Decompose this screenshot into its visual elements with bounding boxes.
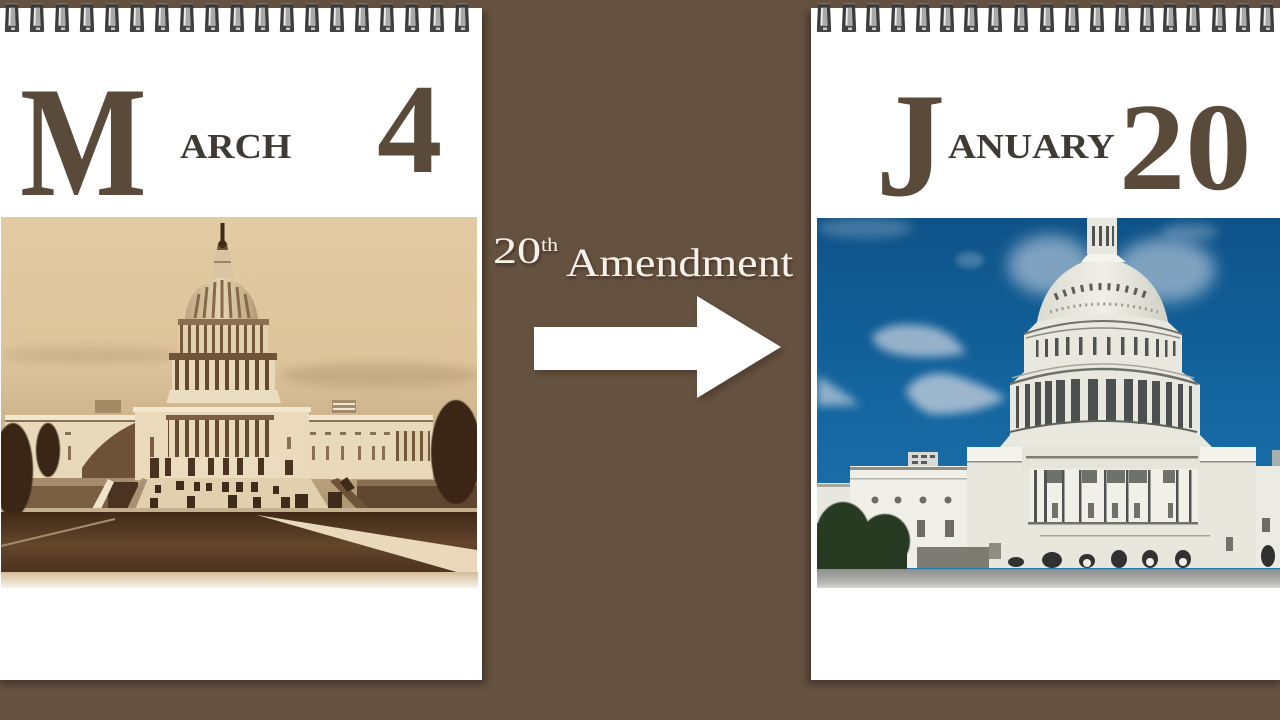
hedges and steps [1, 477, 477, 512]
clouds [817, 218, 1218, 414]
steps [917, 543, 1001, 568]
month heading: January: ANUARY [948, 127, 1115, 166]
trees [0, 400, 481, 517]
capitol wings [5, 400, 433, 480]
heading: 20th Amendment: Amendment [566, 242, 793, 285]
date number: 20: 20 [1119, 77, 1251, 216]
capitol dome [166, 223, 281, 403]
capitol central block [133, 407, 311, 480]
month heading: March: ARCH [180, 127, 291, 166]
arrow: March to January [534, 296, 785, 402]
tree [816, 502, 910, 569]
binding rings: right calendar [818, 3, 1274, 32]
month heading: January: J [876, 63, 945, 228]
image: modern Capitol building [816, 218, 1280, 588]
date number: 4: 4 [377, 58, 442, 200]
month heading: January [876, 63, 1115, 228]
heading: 20th Amendment: th [541, 235, 558, 256]
panel: March 4 calendar page [0, 8, 486, 685]
capitol wings [817, 450, 1280, 568]
month heading: March [20, 54, 291, 229]
month heading: March: M [20, 54, 147, 229]
heading: 20th Amendment [493, 231, 793, 285]
panel: January 20 calendar page [807, 8, 1280, 685]
capitol central block [967, 445, 1275, 568]
lawn and path [1, 512, 477, 573]
capitol dome [1000, 218, 1212, 447]
binding rings: left calendar [6, 3, 468, 32]
image: sepia Capitol building [0, 217, 481, 588]
heading: 20th Amendment: 20 [493, 231, 541, 272]
